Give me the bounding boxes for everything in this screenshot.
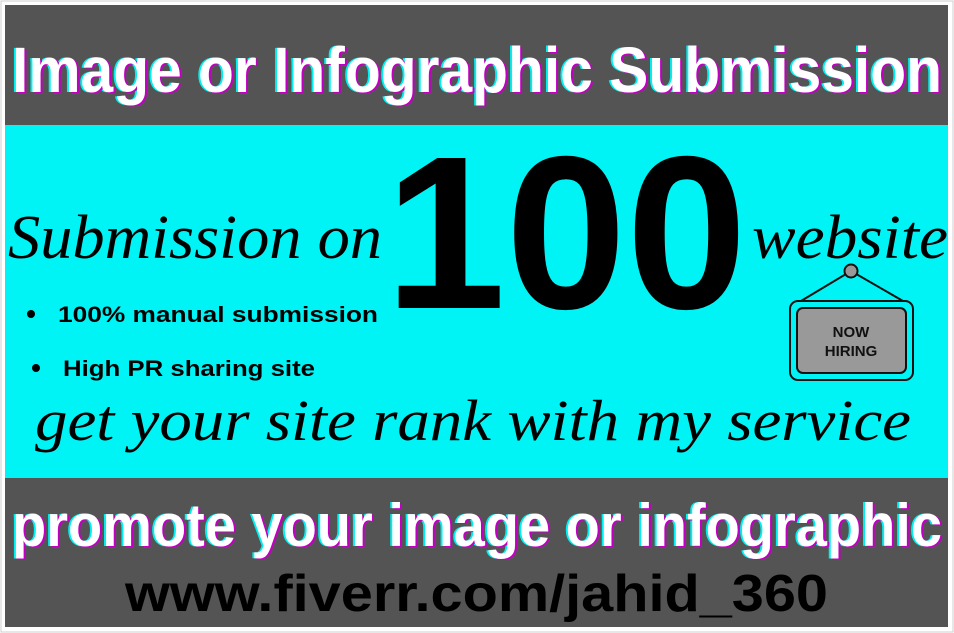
bullet list [27, 302, 378, 381]
bullet list: High PR sharing site [63, 356, 315, 381]
icon: now hiring sign [790, 264, 913, 380]
tagline: get your site rank with my service [35, 388, 911, 453]
panel: bottom band [5, 478, 948, 627]
icon: now hiring sign: NOW [833, 324, 870, 341]
panel: cyan main band [5, 112, 948, 478]
text: Submission on: Submission on [8, 204, 382, 272]
panel: top header band [5, 5, 948, 125]
big number 100: 100 [385, 112, 747, 355]
text: website: website [752, 204, 948, 272]
bullet list: 100% manual submission [58, 302, 378, 327]
icon: now hiring sign: HIRING [825, 343, 877, 360]
url: www.fiverr.com/jahid_360 [124, 565, 828, 623]
